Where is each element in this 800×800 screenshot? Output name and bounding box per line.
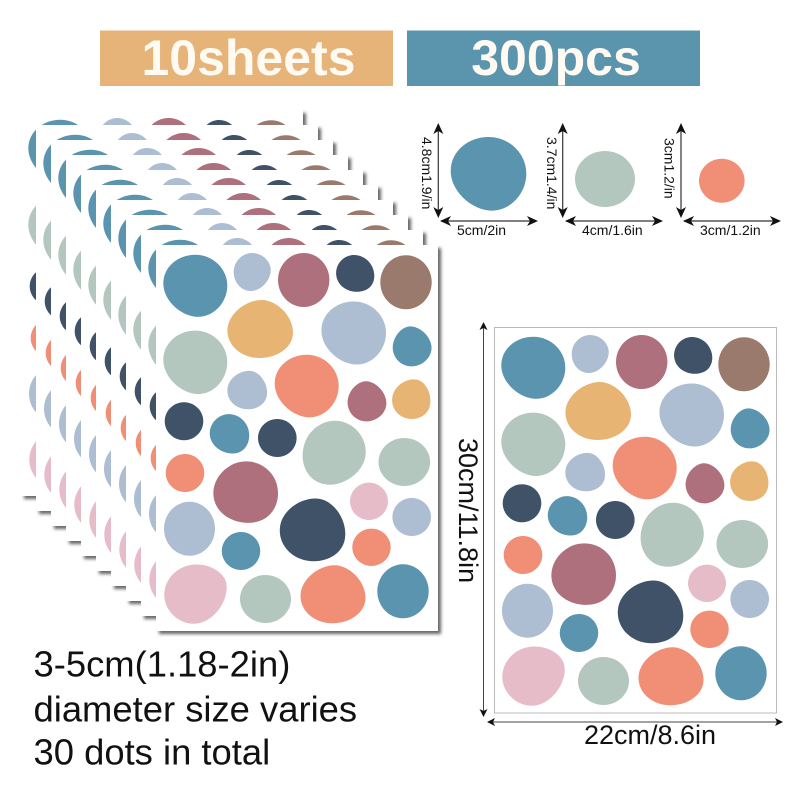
sheet 1 (front) (154, 245, 441, 634)
banner: 300pcs: 300pcs (471, 30, 641, 86)
size sample: large dot 5cm: 5cm/2in (457, 222, 506, 238)
sheet frame (494, 328, 776, 713)
sheet 8 (49, 140, 336, 529)
width label: 22cm/8.6in (584, 720, 716, 750)
sheet 5 (94, 185, 381, 574)
description text: diameter size varies (34, 688, 357, 730)
description text (34, 644, 357, 772)
sheet 10 (back) (19, 110, 306, 499)
sheet 9 (34, 125, 321, 514)
size sample: medium dot 4cm: 3.7cm1.4/in (544, 137, 560, 209)
size sample: small dot 3cm (662, 123, 781, 238)
size sample: small dot 3cm: 3cm1.2/in (662, 138, 678, 199)
sheet 3 (124, 215, 411, 604)
size sample: medium dot 4cm (544, 123, 663, 238)
size sample: medium dot 4cm: 4cm/1.6in (582, 222, 643, 238)
description text: 3-5cm(1.18-2in) (34, 644, 290, 684)
size sample: large dot 5cm: 4.8cm1.9/in (419, 137, 435, 209)
single sheet with dimensions (453, 322, 783, 750)
stack of 10 sticker sheets (19, 110, 441, 634)
size sample: large dot 5cm (419, 123, 538, 238)
description text: 30 dots in total (34, 732, 270, 772)
sheet 2 (139, 230, 426, 619)
sheet 7 (64, 155, 351, 544)
sheet 6 (79, 170, 366, 559)
banner: 300pcs (407, 30, 700, 86)
height label: 30cm/11.8in (453, 438, 483, 583)
sheet 4 (109, 200, 396, 589)
height arrow (480, 322, 488, 717)
sheet dots (492, 329, 774, 716)
banner: 10sheets: 10sheets (141, 30, 356, 86)
size sample: small dot 3cm: 3cm/1.2in (700, 222, 761, 238)
width arrow (487, 718, 783, 726)
